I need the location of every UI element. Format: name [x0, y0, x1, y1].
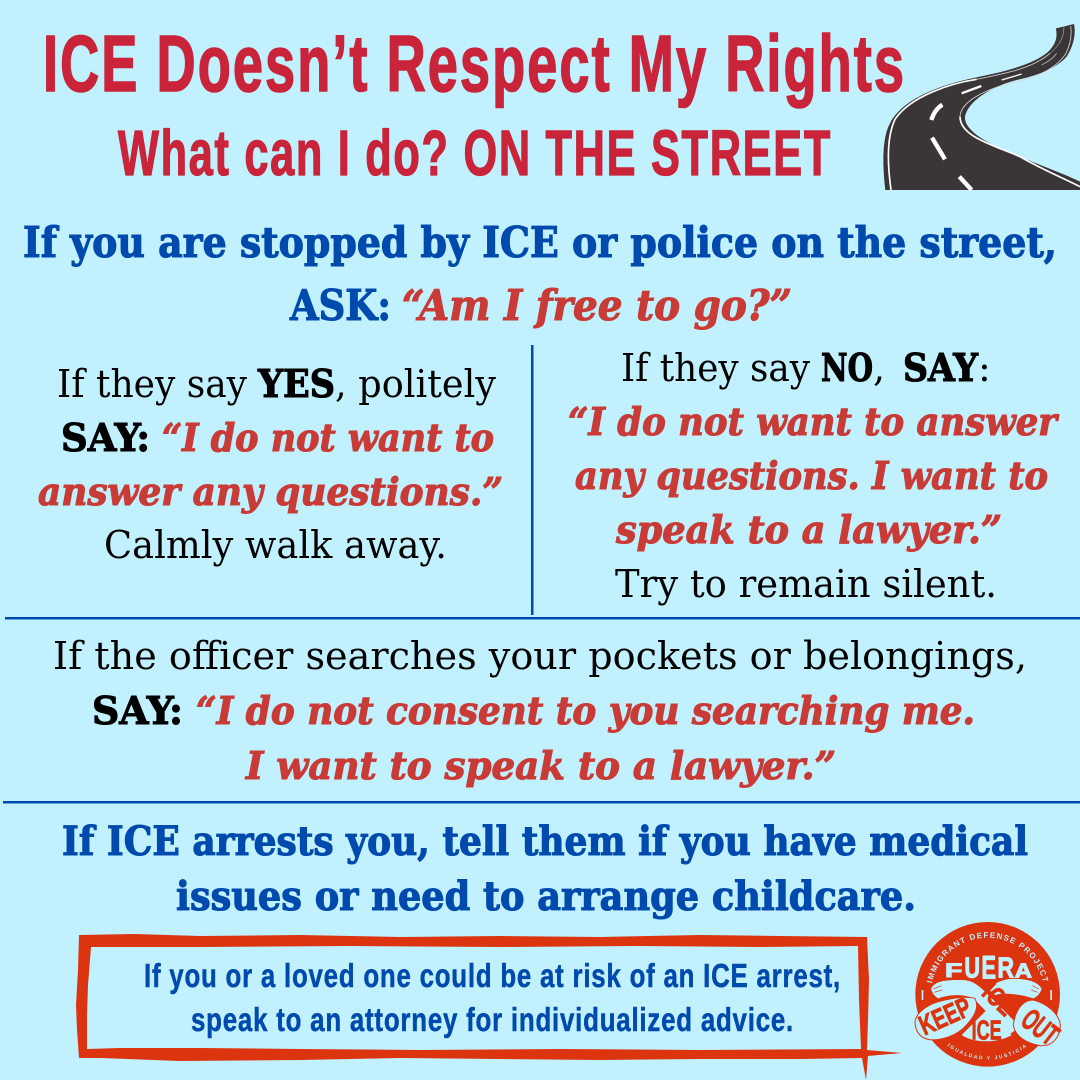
heading: if ICE arrests you: issues or need to arrange childcare. [176, 873, 916, 920]
heading: stopped by ICE: “Am I free to go?” [402, 281, 792, 330]
panel: officer searches: “I do not consent to you searching me. [196, 688, 975, 733]
panel: if they say yes: , politely [335, 362, 496, 406]
icon: Immigrant Defense Project logo: IGUALDAD Y JUSTICIA [948, 1043, 1026, 1060]
panel: if they say yes: answer any questions.” [38, 469, 503, 514]
panel: if they say no: : [978, 346, 991, 390]
heading: stopped by ICE [23, 218, 1057, 330]
panel: if they say yes: Calmly walk away. [104, 523, 447, 567]
heading: if ICE arrests you [62, 818, 1028, 920]
panel: if they say no: SAY [903, 345, 979, 390]
panel: if they say no: Try to remain silent. [615, 562, 997, 606]
callout text [144, 957, 841, 1038]
icon: Immigrant Defense Project logo: R [997, 953, 1014, 985]
panel: if they say yes: If they say [57, 362, 247, 406]
icon: Immigrant Defense Project logo: KEEP [914, 992, 976, 1042]
callout: speak to an attorney [76, 934, 902, 1080]
callout text: If you or a loved one could be at risk of an ICE arrest, [144, 957, 841, 994]
heading: stopped by ICE: ASK: [289, 281, 391, 330]
panel: if they say no [568, 345, 1060, 606]
panel: if they say yes: SAY: [61, 415, 150, 460]
icon: winding road [883, 24, 1080, 190]
panel: if they say no: , [873, 346, 885, 390]
panel: if they say yes [38, 361, 503, 567]
icon: Immigrant Defense Project logo: A [1015, 960, 1032, 983]
icon: Immigrant Defense Project logo: IMMIGRANT DEFENSE PROJECT [926, 932, 1048, 983]
panel: officer searches [53, 634, 1027, 788]
icon: Immigrant Defense Project logo: U [964, 953, 980, 985]
panel: if they say no: “I do not want to answer [568, 399, 1060, 444]
panel: officer searches: SAY: [92, 688, 183, 733]
icon: Immigrant Defense Project logo: F [945, 961, 963, 982]
panel: if they say no: NO [821, 345, 873, 390]
panel: if they say yes: YES [257, 361, 335, 406]
panel: if they say no: speak to a lawyer.” [615, 507, 1002, 552]
panel: if they say no: any questions. I want to [575, 453, 1048, 498]
panel: officer searches: I want to speak to a lawyer.” [245, 743, 836, 788]
icon: Immigrant Defense Project logo: ICE [977, 977, 1021, 1022]
panel: if they say yes: “I do not want to [162, 415, 494, 460]
icon: Immigrant Defense Project logo: ICE [972, 1014, 1002, 1045]
callout hand-drawn border [76, 934, 902, 1080]
panel: officer searches: If the officer searches your pockets or belongings, [53, 634, 1027, 678]
icon: Immigrant Defense Project logo: OUT [1015, 1003, 1065, 1052]
callout text: speak to an attorney for individualized advice. [191, 1001, 794, 1038]
panel: if they say no: If they say [621, 346, 810, 390]
icon: Immigrant Defense Project logo [914, 922, 1065, 1067]
icon: Immigrant Defense Project logo: E [981, 948, 996, 985]
